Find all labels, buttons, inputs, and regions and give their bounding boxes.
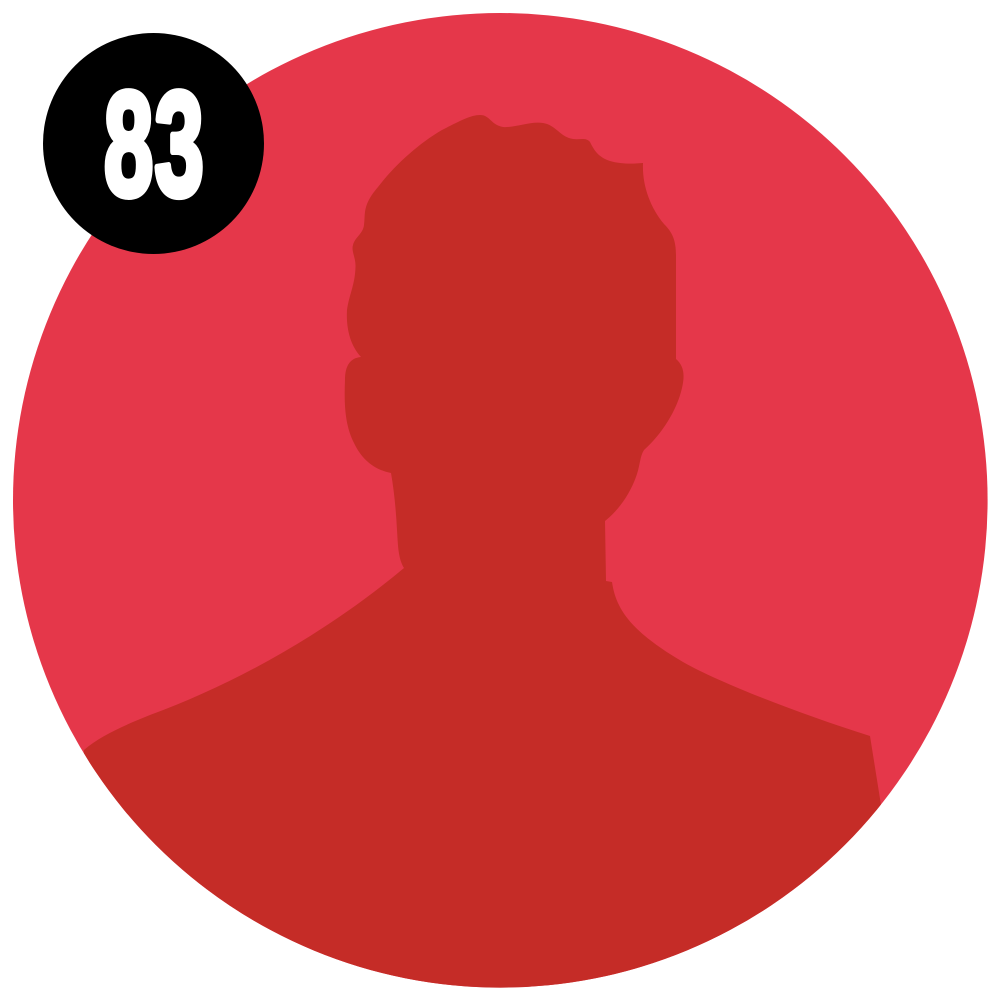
badge circle [43, 33, 264, 254]
number badge [43, 33, 264, 254]
badge number: 83 [104, 62, 205, 227]
person silhouette [60, 115, 881, 1000]
